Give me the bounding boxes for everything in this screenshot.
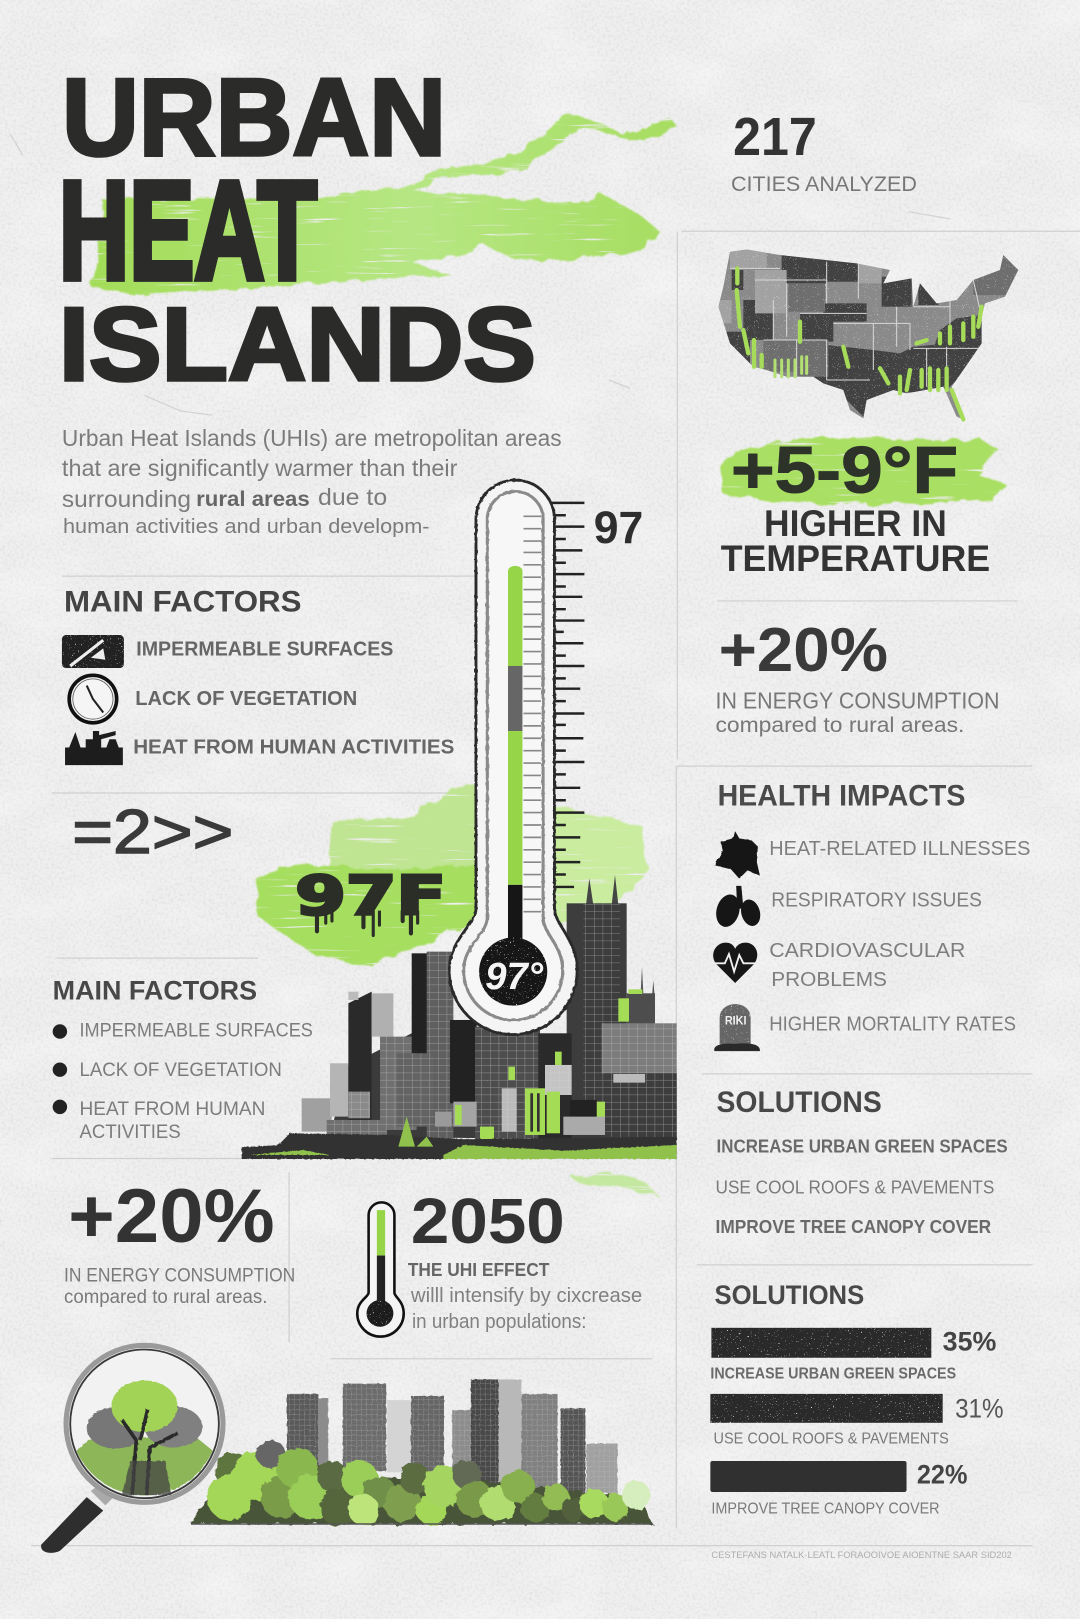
stat: energy consumption bottom: IN ENERGY CONSUMPTION — [64, 1264, 295, 1286]
magnifying glass — [41, 1345, 223, 1553]
green smudge — [570, 1172, 661, 1198]
solutions bar chart: IMPROVE TREE CANOPY COVER — [711, 1501, 940, 1518]
temperature callout: HIGHER IN — [764, 502, 947, 544]
health impacts: RESPIRATORY ISSUES — [771, 889, 982, 912]
thermometer tick scale — [551, 503, 584, 887]
health impacts: CARDIOVASCULAR — [769, 939, 965, 962]
stat: energy consumption right: compared to rural areas. — [716, 712, 964, 737]
intro text: surrounding — [62, 486, 191, 512]
icon: heart pulse — [711, 943, 759, 983]
97F dripping label — [295, 864, 446, 937]
stat: energy consumption bottom: +20% — [68, 1174, 275, 1259]
temperature callout: TEMPERATURE — [721, 537, 990, 579]
solutions list: SOLUTIONS — [717, 1086, 882, 1119]
health impacts: HIGHER MORTALITY RATES — [769, 1012, 1016, 1035]
stat: 2050 projection: in urban populations: — [412, 1310, 586, 1333]
temperature callout: +5-9°F — [731, 434, 958, 508]
bar: 31% — [710, 1394, 943, 1423]
stat: energy consumption bottom: compared to rural areas. — [64, 1286, 267, 1308]
icon: tombstone: RIKI — [725, 1013, 747, 1027]
stat: energy consumption right — [716, 616, 999, 737]
intro text: rural areas — [196, 486, 310, 511]
stat: 2050 projection: 2050 — [411, 1185, 565, 1257]
green brush behind title — [91, 114, 676, 294]
icon: road surface — [62, 635, 124, 668]
title: HEAT — [59, 152, 317, 309]
main factors with icons — [62, 585, 454, 765]
title — [59, 57, 536, 403]
intro text: due to — [318, 484, 387, 510]
thermometer value: 97 — [594, 502, 643, 553]
main factors with icons: MAIN FACTORS — [64, 585, 301, 618]
health impacts: PROBLEMS — [771, 968, 887, 991]
main factors with icons: LACK OF VEGETATION — [135, 687, 357, 710]
stat: energy consumption right: +20% — [719, 616, 888, 685]
solutions bar chart: USE COOL ROOFS & PAVEMENTS — [713, 1430, 949, 1447]
intro text: Urban Heat Islands (UHIs) are metropolitan areas — [62, 425, 562, 451]
bar: 35% — [711, 1328, 931, 1358]
97F dripping label: 97F — [295, 864, 446, 927]
green brush behind 97F — [256, 783, 648, 966]
solutions bar chart: INCREASE URBAN GREEN SPACES — [710, 1365, 956, 1382]
solutions bar chart — [710, 1280, 1004, 1518]
intro text: human activities and urban developm- — [63, 515, 430, 538]
main factors bullet list: IMPERMEABLE SURFACES — [80, 1020, 313, 1042]
intro text: that are significantly warmer than their — [62, 455, 458, 481]
thermometer — [449, 480, 577, 1035]
small thermometer icon — [357, 1202, 404, 1337]
stat: energy consumption right: IN ENERGY CONSUMPTION — [716, 687, 999, 713]
mercury column — [508, 566, 522, 947]
stat: 2050 projection: willl intensify by cixcrease — [410, 1284, 642, 1307]
ratio text: =2>> — [72, 798, 233, 867]
stat: cities analyzed: CITIES ANALYZED — [731, 171, 917, 196]
main factors bullet list: LACK OF VEGETATION — [80, 1059, 282, 1081]
thermometer inner ticks — [523, 516, 541, 912]
icon: factory — [65, 731, 123, 765]
intro text — [62, 425, 562, 538]
footer credit: CESTEFANS NATALK·LEATL FORAOOIVOE AIOENTNE SAAR SID202 — [711, 1550, 1012, 1560]
stat: energy consumption bottom — [64, 1174, 295, 1308]
solutions list — [716, 1086, 1008, 1237]
stat: cities analyzed — [731, 107, 917, 196]
main factors bullet list — [53, 975, 313, 1143]
main factors bullet list: MAIN FACTORS — [53, 975, 257, 1005]
panel dividers — [31, 231, 1080, 1546]
icon: overheated head — [714, 831, 760, 879]
thermometer: 97° — [485, 955, 544, 998]
main factors bullet list: HEAT FROM HUMAN — [80, 1098, 265, 1120]
solutions list: INCREASE URBAN GREEN SPACES — [717, 1135, 1008, 1156]
icon: gauge — [69, 675, 117, 723]
title: URBAN — [62, 57, 446, 179]
bar: 22% — [710, 1461, 907, 1492]
health impacts — [711, 779, 1030, 1051]
health impacts: HEALTH IMPACTS — [718, 779, 965, 812]
stat: 2050 projection — [408, 1185, 642, 1333]
solutions bar chart: SOLUTIONS — [714, 1280, 864, 1310]
US heat map — [713, 247, 1023, 423]
background buildings — [287, 1379, 617, 1498]
lens tree — [76, 1380, 213, 1495]
solutions list: IMPROVE TREE CANOPY COVER — [716, 1216, 992, 1237]
city skyline — [242, 875, 677, 1159]
temperature callout — [721, 434, 1008, 579]
main factors with icons: HEAT FROM HUMAN ACTIVITIES — [133, 736, 454, 759]
solutions list: USE COOL ROOFS & PAVEMENTS — [716, 1177, 994, 1198]
health impacts: HEAT-RELATED ILLNESSES — [769, 837, 1030, 860]
trees — [191, 1439, 653, 1526]
icon: lungs — [713, 886, 763, 930]
solutions bar chart: 35% — [943, 1327, 997, 1357]
stat: 2050 projection: THE UHI EFFECT — [408, 1259, 550, 1280]
main factors bullet list: ACTIVITIES — [80, 1121, 181, 1143]
stat: cities analyzed: 217 — [733, 107, 817, 167]
solutions bar chart: 31% — [955, 1394, 1004, 1424]
green city illustration — [191, 1379, 653, 1526]
main factors with icons: IMPERMEABLE SURFACES — [136, 638, 393, 661]
solutions bar chart: 22% — [917, 1460, 968, 1490]
title: ISLANDS — [59, 287, 536, 403]
icon: tombstone — [714, 1004, 760, 1051]
